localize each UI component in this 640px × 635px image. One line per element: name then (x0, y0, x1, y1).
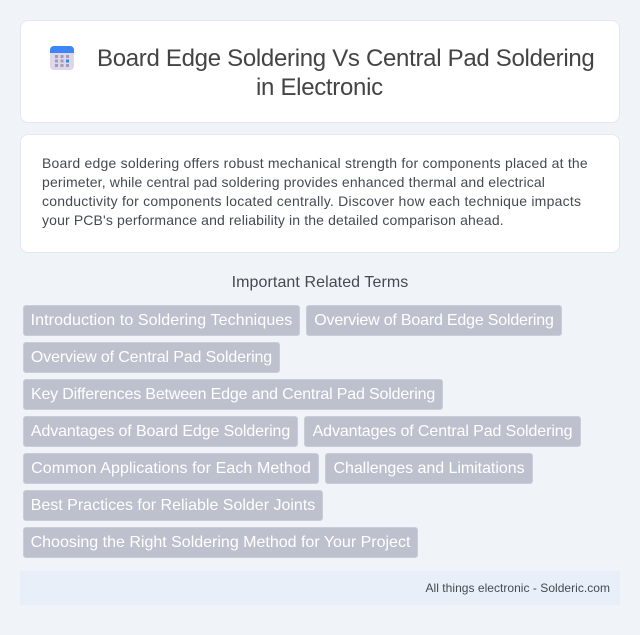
tag: Overview of Board Edge Soldering (314, 312, 554, 329)
footer bar (20, 571, 620, 605)
tag (325, 453, 533, 484)
intro paragraph: Board edge soldering offers robust mechanical strength for components placed at the (42, 155, 588, 171)
tag: Challenges and Limitations (333, 460, 525, 477)
tag: Advantages of Board Edge Soldering (31, 423, 290, 440)
title: in Electronic (256, 74, 383, 101)
tag: Best Practices for Reliable Solder Joints (31, 497, 315, 514)
tag: Choosing the Right Soldering Method for Your Project (31, 534, 410, 551)
tag (23, 490, 323, 521)
intro paragraph: perimeter, while central pad soldering provides enhanced thermal and electrical (42, 174, 545, 190)
intro paragraph: conductivity for components located centrally. Discover how each technique impacts (42, 193, 581, 209)
tag: Advantages of Central Pad Soldering (313, 423, 572, 440)
footer text: All things electronic - Solderic.com (426, 581, 610, 595)
intro paragraph (42, 155, 588, 228)
title: Board Edge Soldering Vs Central Pad Soldering (97, 45, 594, 72)
intro text panel (20, 134, 620, 253)
tag (23, 453, 319, 484)
tag: Introduction to Soldering Techniques (31, 312, 292, 329)
tag: Overview of Central Pad Soldering (31, 349, 272, 366)
intro paragraph: your PCB's performance and reliability in the detailed comparison ahead. (42, 212, 504, 228)
tag: Key Differences Between Edge and Central Pad Soldering (31, 386, 435, 403)
title (97, 45, 594, 101)
icon: calendar (50, 46, 74, 70)
tag (23, 305, 300, 336)
tag (306, 305, 562, 336)
header card (20, 20, 620, 123)
tag (23, 527, 418, 558)
tag (304, 416, 581, 447)
tag: Common Applications for Each Method (31, 460, 311, 477)
term tags (23, 305, 581, 558)
tag (23, 379, 443, 410)
section heading: Important Related Terms (232, 274, 408, 291)
tag (23, 342, 280, 373)
tag (23, 416, 298, 447)
